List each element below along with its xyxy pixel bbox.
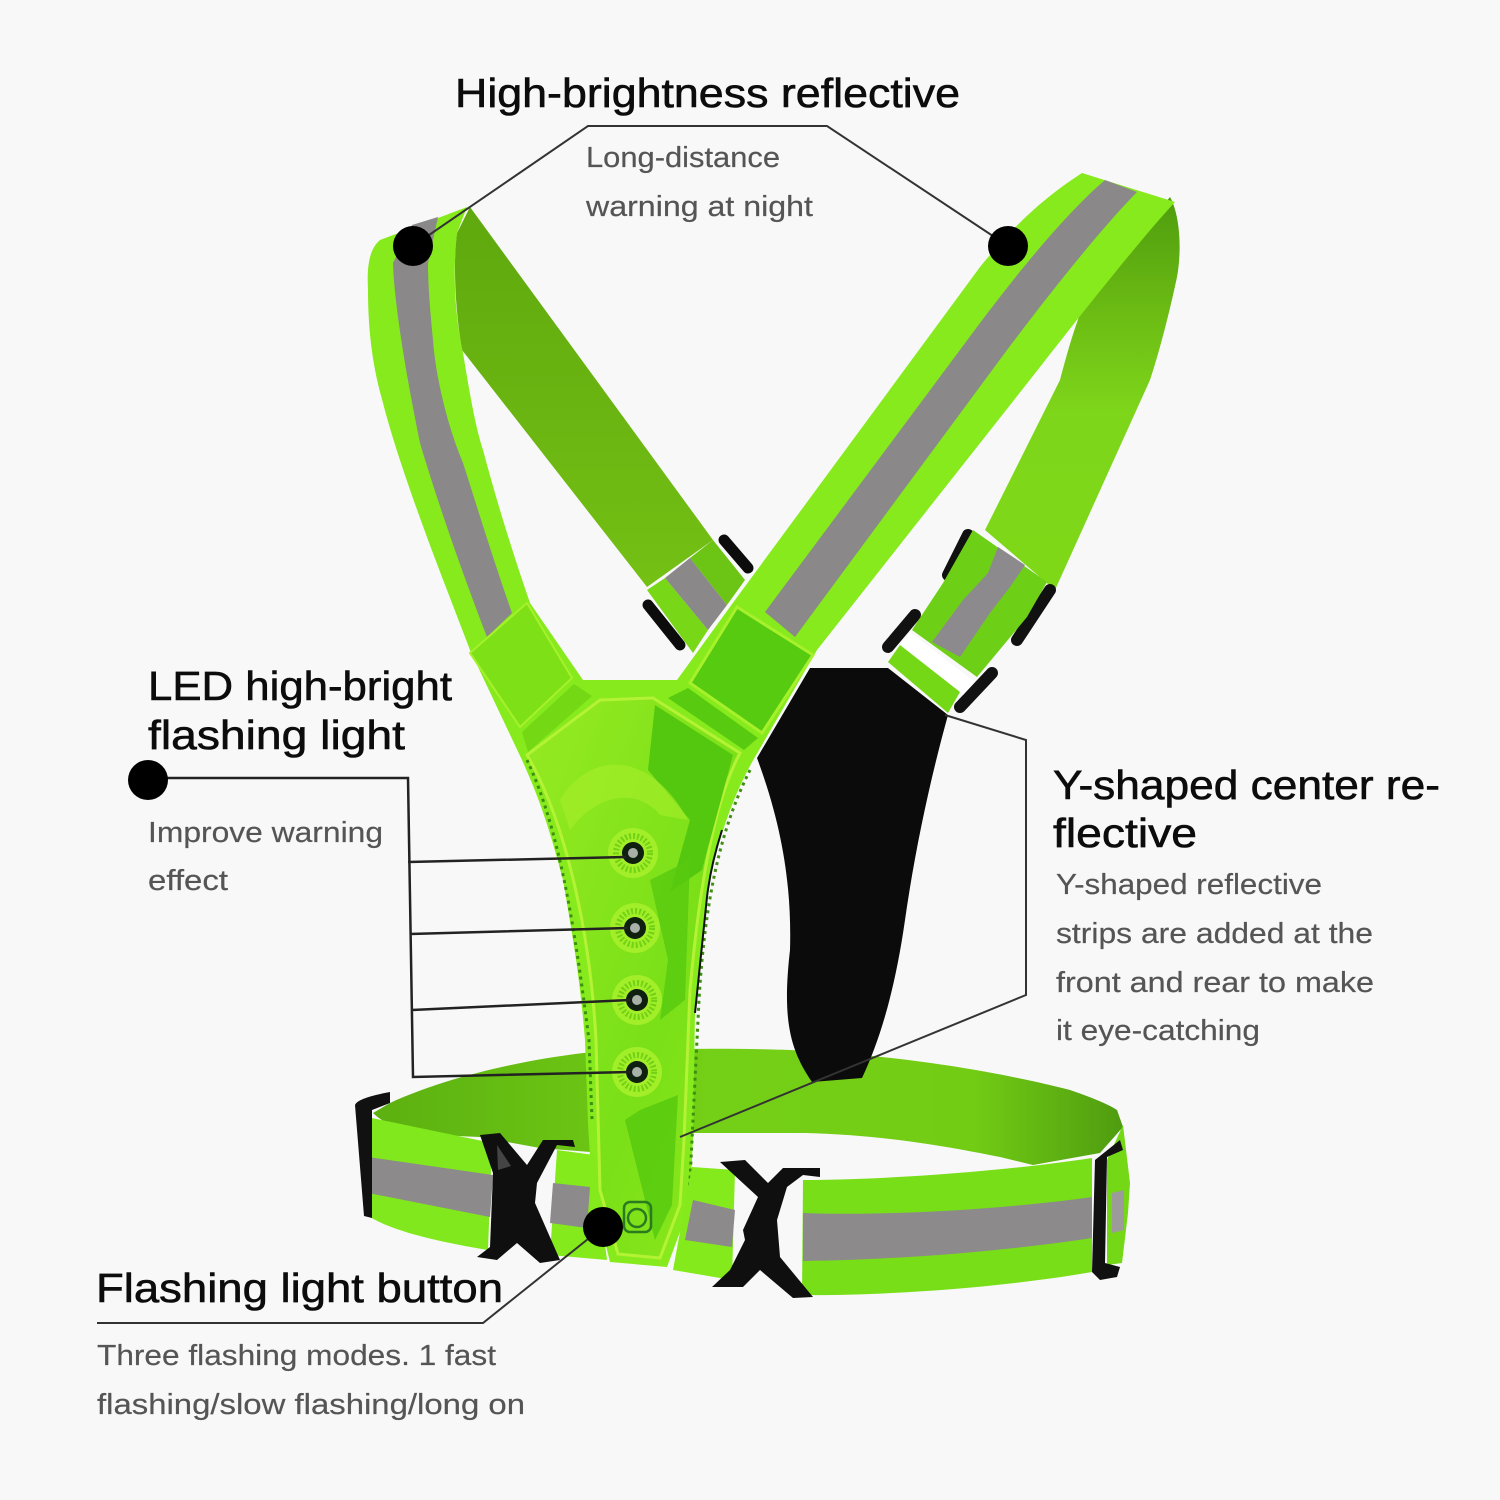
text: button detail: flashing/slow flashing/long on: [97, 1389, 525, 1421]
vest front straps: [368, 173, 1175, 1267]
leader lines: [97, 126, 1026, 1323]
sheen: [560, 765, 688, 830]
vest illustration: [355, 173, 1180, 1298]
left band: [522, 684, 592, 752]
text: long distance: warning at night: [585, 191, 813, 223]
heading: LED: flashing light: [148, 712, 406, 758]
right buckle lower fold: [888, 645, 960, 713]
right X buckle: [712, 1160, 820, 1298]
center panel: [527, 698, 740, 1258]
text: improve warning: effect: [148, 865, 228, 897]
left patch: [470, 603, 572, 727]
waist belt middle-left segment: [550, 1150, 607, 1260]
left back strap: [455, 207, 713, 587]
right back strap: [985, 197, 1180, 590]
right patch: [690, 607, 813, 733]
left buckle: [647, 540, 748, 653]
right buckle: [888, 530, 1050, 707]
dark reflection: [648, 705, 733, 892]
belt right end wrap: [1107, 1125, 1130, 1265]
LED lights: [608, 828, 662, 1097]
text: long distance: Long-distance: [586, 142, 780, 174]
edge shadow: [695, 830, 722, 1013]
icon: power button: [624, 1202, 651, 1232]
left X buckle: [477, 1133, 575, 1263]
text: improve warning: Improve warning: [148, 817, 383, 849]
stitching left: [527, 760, 592, 1120]
lower reflection: [625, 1095, 678, 1240]
waist belt right segment: [802, 1158, 1092, 1295]
waist belt back: [373, 1049, 1123, 1165]
left belt end clip: [355, 1092, 390, 1218]
heading: LED: [148, 663, 453, 758]
text: Y-shaped detail: it eye-catching: [1056, 1015, 1260, 1047]
marker dots: [128, 226, 1028, 1247]
heading: Y-shaped: flective: [1053, 810, 1197, 856]
mid reflection: [650, 860, 690, 1020]
text: long distance: [585, 142, 813, 223]
heading: LED: LED high-bright: [148, 663, 453, 709]
waist belt middle-right segment: [673, 1167, 735, 1280]
heading: Y-shaped: Y-shaped center re-: [1053, 762, 1440, 808]
text: button detail: Three flashing modes. 1 fast: [97, 1340, 496, 1372]
heading: Y-shaped: [1053, 762, 1440, 856]
text: Y-shaped detail: Y-shaped reflective: [1056, 869, 1322, 901]
stitching right: [689, 770, 750, 1200]
Y-shaped reflective panels: [470, 603, 813, 1258]
left strap reflective strip: [393, 217, 512, 637]
text: Y-shaped detail: [1056, 869, 1374, 1047]
text: button detail: [97, 1340, 525, 1421]
text: Y-shaped detail: front and rear to make: [1056, 967, 1374, 999]
right band: [668, 688, 758, 750]
text: improve warning: [148, 817, 383, 897]
text: Y-shaped detail: strips are added at the: [1056, 918, 1373, 950]
black back panel: [757, 668, 948, 1082]
heading: reflective: High-brightness reflective: [455, 70, 960, 116]
right belt end clip: [1092, 1140, 1123, 1280]
right strap reflective strip: [765, 180, 1137, 637]
heading: button: Flashing light button: [96, 1265, 503, 1311]
waist belt left segment: [367, 1117, 493, 1250]
